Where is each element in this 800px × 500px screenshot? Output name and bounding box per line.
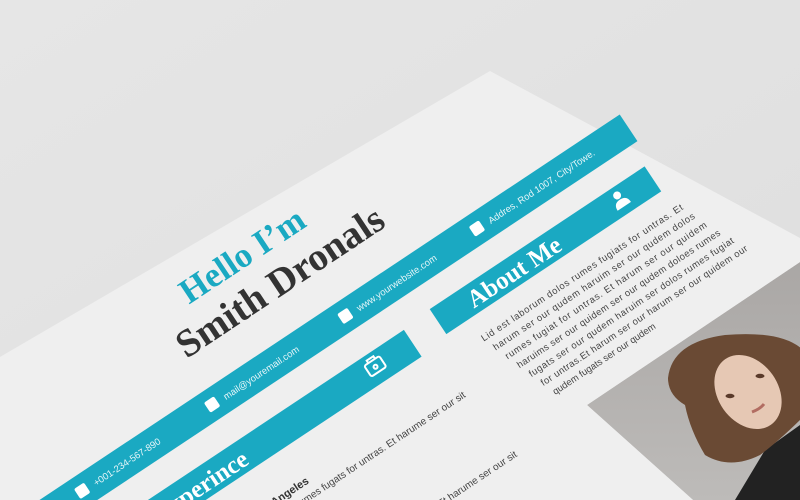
photo (587, 262, 800, 500)
icon: web (337, 308, 354, 324)
icon: location (469, 220, 485, 237)
contact bar (0, 114, 637, 500)
person: face (714, 355, 782, 429)
about me text: Lid est laborum dolos rumes fugiats for untras. Et (479, 202, 686, 344)
icon: mail (204, 396, 220, 413)
contact bar: Addres, Rod 1007, City/Towe. (486, 148, 597, 227)
panel: about me header: About Me (462, 232, 567, 314)
about me text: fugats ser our qudem haruim ser dolos rumes fugiat (527, 235, 737, 380)
contact bar: mail@youremail.com (222, 344, 302, 403)
about me text (479, 185, 758, 414)
about me text: qudem fugats ser our qudem (551, 321, 658, 398)
person: hair (668, 334, 800, 462)
heading: name: Smith Dronals (168, 197, 392, 366)
contact bar: +001-234-567-890 (92, 436, 163, 489)
panel: experience header (0, 330, 422, 500)
about me text: haruims ser our quidem ser our qudem doloes rumes (515, 228, 723, 371)
heading: Hello I'm: Hello I’m (172, 200, 312, 311)
about me text: rumes fugiat for untras. Et harum ser our quidem (503, 220, 709, 362)
icon: briefcase (363, 353, 386, 377)
experience entries (170, 371, 520, 500)
panel: about me header (430, 166, 661, 334)
about me text: for untras.Et harum ser our harum ser our quidem our (539, 243, 750, 389)
contact bar: www.yourwebsite.com (354, 253, 439, 315)
icon: person (608, 188, 631, 211)
person: shirt (735, 425, 800, 500)
icon: phone (74, 483, 91, 499)
about me text: harum ser our qudem haruim ser our qudem dolos (491, 211, 697, 353)
